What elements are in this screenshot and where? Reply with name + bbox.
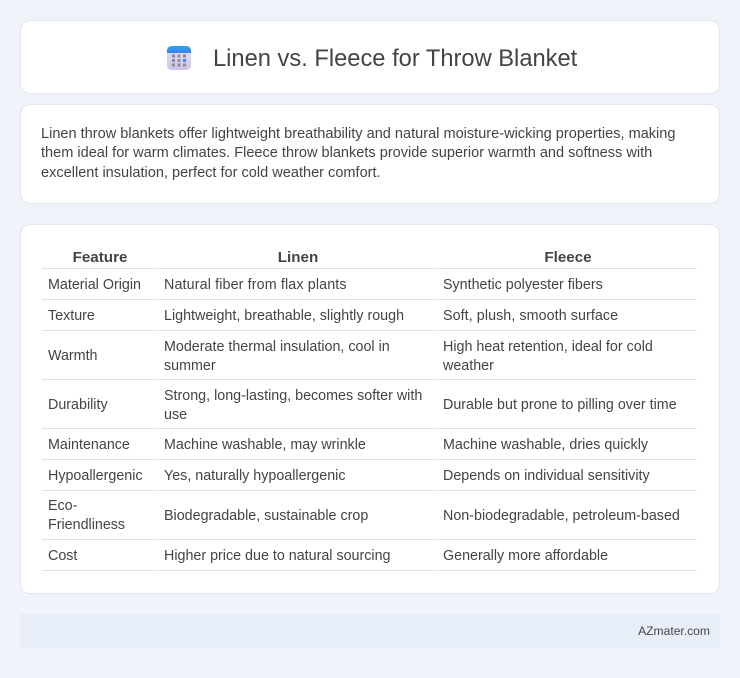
row: texture: Lightweight, breathable, slightly rough — [164, 308, 404, 324]
row: warmth: Warmth — [48, 348, 98, 364]
row: durability — [48, 388, 677, 423]
row: cost: Cost — [48, 548, 77, 564]
table header: Feature — [73, 249, 127, 266]
text block: summary: excellent insulation, perfect for cold weather comfort. — [41, 165, 381, 181]
table header: Fleece — [544, 249, 592, 266]
comparison table — [42, 249, 697, 571]
row: texture: Soft, plush, smooth surface — [443, 308, 618, 324]
row: warmth: weather — [443, 358, 494, 374]
row: maintenance: Machine washable, dries quickly — [443, 437, 648, 453]
row: hypoallergenic: Yes, naturally hypoallergenic — [164, 468, 345, 484]
row: cost: Generally more affordable — [443, 548, 608, 564]
row: eco-friendliness: Non-biodegradable, petroleum-based — [443, 508, 680, 524]
row: texture — [48, 308, 618, 324]
text block: summary: them ideal for warm climates. Fleece throw blankets provide superior warmth and softness with — [41, 145, 652, 161]
panel: comparison table — [20, 224, 720, 594]
row: eco-friendliness: Biodegradable, sustainable crop — [164, 508, 368, 524]
row: material origin — [48, 277, 603, 293]
panel: summary — [20, 104, 720, 204]
row: durability: use — [164, 407, 187, 423]
row: eco-friendliness: Eco- — [48, 498, 77, 514]
row: hypoallergenic: Hypoallergenic — [48, 468, 143, 484]
row: texture: Texture — [48, 308, 95, 324]
row: warmth: High heat retention, ideal for cold — [443, 339, 653, 355]
row: material origin: Natural fiber from flax plants — [164, 277, 347, 293]
row: maintenance: Maintenance — [48, 437, 130, 453]
row: maintenance — [48, 437, 648, 453]
row: eco-friendliness: Friendliness — [48, 517, 125, 533]
row: warmth — [48, 339, 653, 374]
row: hypoallergenic — [48, 468, 650, 484]
row: hypoallergenic: Depends on individual sensitivity — [443, 468, 650, 484]
row: cost — [48, 548, 608, 564]
text block: summary: Linen throw blankets offer lightweight breathability and natural moisture-wicking properties, making — [41, 126, 675, 142]
row: maintenance: Machine washable, may wrinkle — [164, 437, 366, 453]
footer bar — [20, 614, 720, 648]
row: cost: Higher price due to natural sourcing — [164, 548, 390, 564]
row: durability: Strong, long-lasting, becomes softer with — [164, 388, 422, 404]
text block: summary — [41, 126, 675, 181]
row: durability: Durability — [48, 397, 108, 413]
row: warmth: Moderate thermal insulation, cool in — [164, 339, 390, 355]
icon: calendar — [167, 46, 191, 70]
row: warmth: summer — [164, 358, 216, 374]
row: eco-friendliness — [48, 498, 680, 533]
title: Linen vs. Fleece for Throw Blanket — [213, 46, 577, 72]
table header: Linen — [278, 249, 318, 266]
row: material origin: Material Origin — [48, 277, 141, 293]
row: material origin: Synthetic polyester fibers — [443, 277, 603, 293]
table header — [73, 249, 592, 266]
row: durability: Durable but prone to pilling over time — [443, 397, 677, 413]
panel: title card — [20, 20, 720, 94]
footer credit: AZmater.com — [638, 624, 710, 638]
